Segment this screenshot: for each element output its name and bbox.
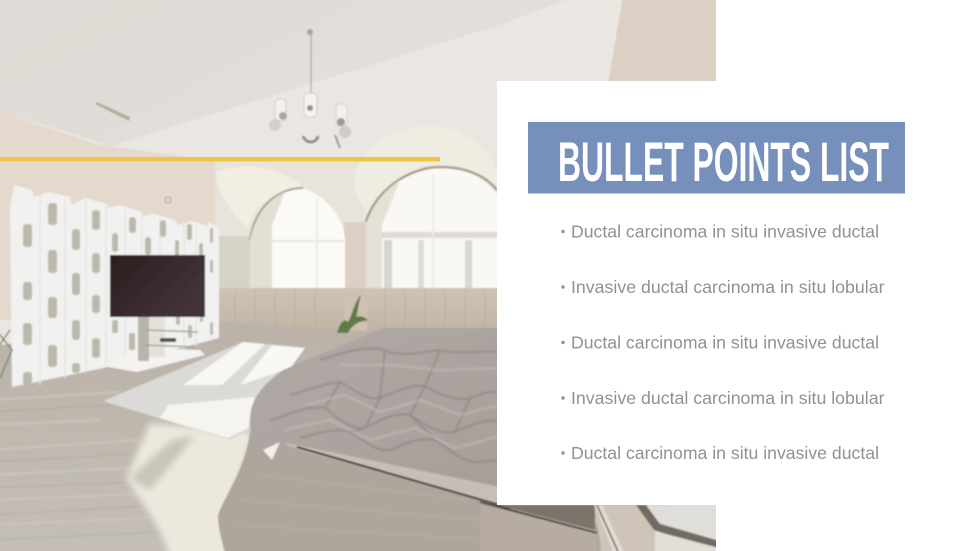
bed frame at lower right xyxy=(480,502,597,551)
left peach wall xyxy=(0,109,260,320)
television on stand xyxy=(108,255,205,372)
window wall xyxy=(215,162,500,337)
chandelier xyxy=(269,29,351,148)
potted plant xyxy=(337,295,368,333)
pillar between windows xyxy=(344,222,368,307)
white patterned partition xyxy=(10,185,219,387)
sheer curtains xyxy=(219,288,500,334)
ceiling left plane xyxy=(0,0,590,146)
side curtain xyxy=(219,236,251,326)
photo: bright attic bedroom xyxy=(0,0,730,551)
bullet item 3: Ductal carcinoma in situ invasive ductal xyxy=(571,332,879,352)
wall smoke detector xyxy=(165,197,171,203)
ceiling vent xyxy=(95,102,130,121)
white area right of photo xyxy=(716,0,980,551)
white content panel xyxy=(497,81,905,505)
floor xyxy=(0,322,730,551)
bullet item 4: Invasive ductal carcinoma in situ lobular xyxy=(571,388,885,408)
first vault xyxy=(217,167,303,228)
bullet item 1: Ductal carcinoma in situ invasive ductal xyxy=(571,222,879,242)
side chair at left xyxy=(0,330,12,378)
second arched window xyxy=(366,167,500,292)
bullet item 2: Invasive ductal carcinoma in situ lobular xyxy=(571,277,885,297)
bed with pintuck cover xyxy=(250,328,510,508)
bullet list xyxy=(561,222,885,463)
sunlight on floor xyxy=(126,423,255,551)
upper right beige wall xyxy=(607,0,730,90)
first arched window xyxy=(250,188,345,292)
title banner xyxy=(528,122,905,194)
wall and stair corner at lower right xyxy=(594,505,730,551)
sunlit rug xyxy=(103,342,305,440)
dark floor foreground xyxy=(218,432,600,551)
second vault xyxy=(354,126,500,213)
yellow accent line xyxy=(0,157,440,162)
bullet item 5: Ductal carcinoma in situ invasive ductal xyxy=(571,443,879,463)
